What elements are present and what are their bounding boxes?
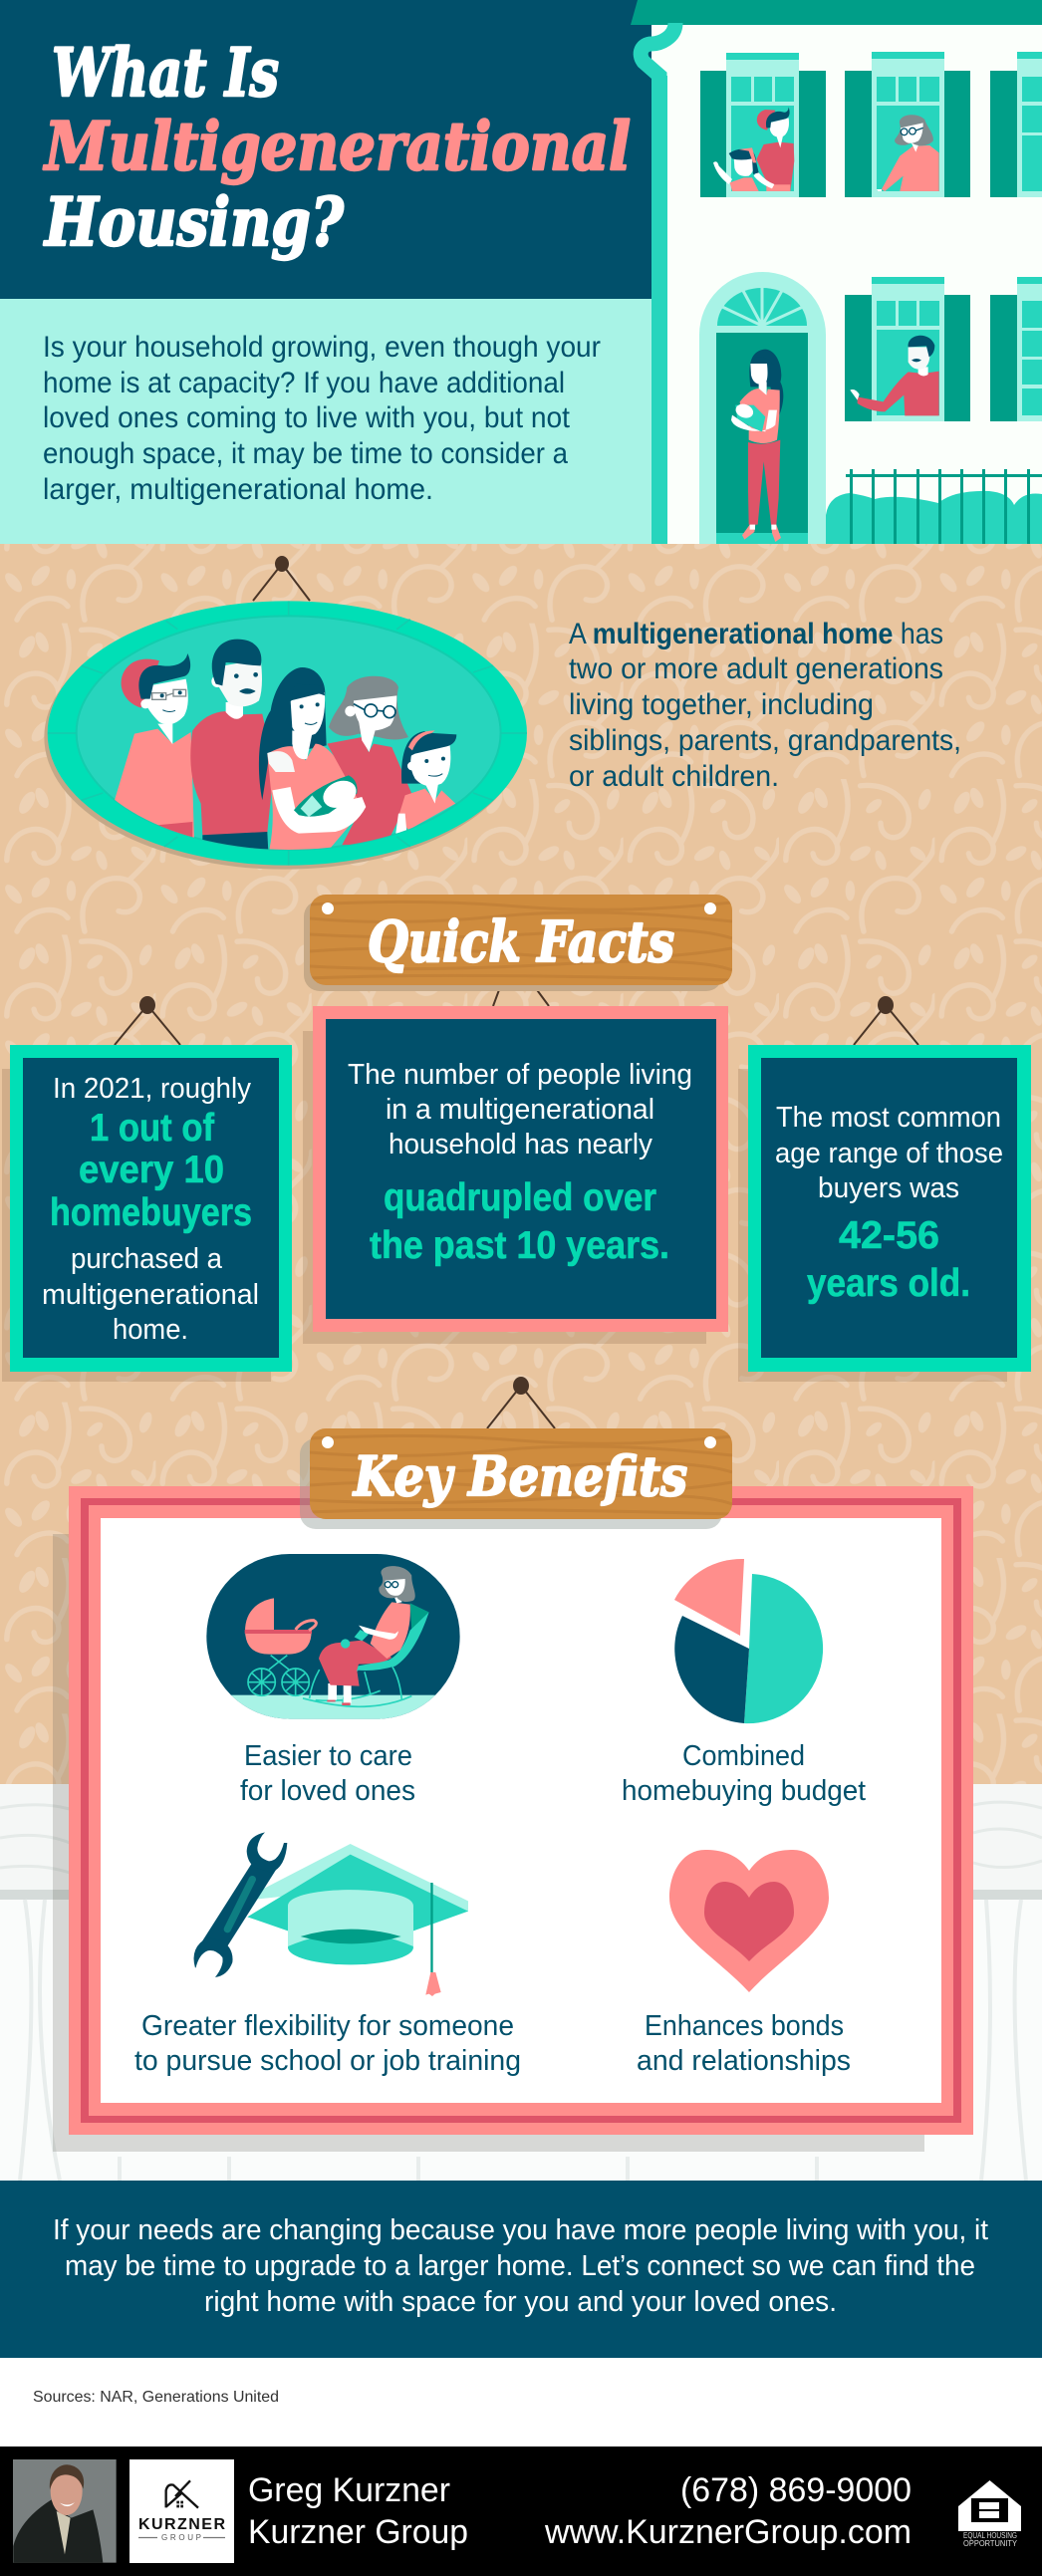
- definition text: [569, 618, 961, 793]
- person: father: [190, 640, 274, 852]
- panel: intro: [0, 299, 651, 544]
- grandmother: [319, 1566, 415, 1705]
- panel: title background: [0, 0, 651, 299]
- agent name: Kurzner Group: [248, 2513, 468, 2551]
- icon: heart: [669, 1850, 829, 1992]
- card text: [42, 1073, 259, 1346]
- card text: multigenerational: [42, 1279, 259, 1311]
- card text: household has nearly: [389, 1129, 652, 1160]
- window: upper middle: [845, 52, 970, 197]
- closing text: right home with space for you and your loved ones.: [204, 2286, 837, 2318]
- intro text: Is your household growing, even though your: [43, 331, 601, 364]
- icon: grandmother with stroller: [206, 1554, 460, 1721]
- window: lower middle: [845, 277, 970, 421]
- benefit labels: [134, 1740, 866, 2077]
- heading: Quick Facts: [368, 909, 674, 975]
- wooden sign: Quick Facts: [304, 895, 732, 991]
- card text: years old.: [807, 1262, 970, 1305]
- figure in upper middle window: [877, 115, 939, 191]
- panel: key benefits frame: [53, 1486, 973, 2152]
- card text: homebuyers: [50, 1191, 252, 1234]
- company logo: [130, 2459, 234, 2563]
- intro text: home is at capacity? If you have additional: [43, 367, 565, 399]
- card text: quadrupled over: [384, 1176, 656, 1219]
- person: grandmother: [327, 676, 411, 845]
- contact details: [544, 2471, 912, 2551]
- title: Multigenerational: [43, 108, 631, 185]
- card text: purchased a: [71, 1243, 223, 1275]
- window: upper left: [700, 53, 826, 197]
- hanging wire: oval: [253, 556, 310, 601]
- panel: call to action: [0, 2181, 1042, 2358]
- card text: 1 out of: [90, 1107, 215, 1150]
- wooden sign: Key Benefits: [300, 1428, 732, 1529]
- card text: [348, 1059, 692, 1267]
- figure: mother and baby in doorway: [731, 350, 783, 542]
- contact details: (678) 869-9000: [680, 2471, 912, 2509]
- company logo: KURZNER: [138, 2516, 225, 2533]
- card: age range: [738, 996, 1031, 1382]
- heading: Key Benefits: [352, 1444, 687, 1508]
- bushes: [826, 491, 1042, 544]
- person: young man: [115, 653, 194, 840]
- background: patterned wall: [0, 544, 1042, 1784]
- hanging wires: center card: [493, 968, 549, 1006]
- fence: [846, 469, 1042, 544]
- title: What Is: [52, 34, 279, 112]
- intro text: [43, 331, 601, 506]
- person: baby in arms: [272, 775, 366, 834]
- panel: footer: [0, 2447, 1042, 2576]
- contact details: www.KurznerGroup.com: [544, 2513, 912, 2551]
- icon: pie chart: [674, 1559, 823, 1723]
- definition text: two or more adult generations: [569, 652, 943, 685]
- closing text: If your needs are changing because you have more people living with you, it: [53, 2214, 988, 2246]
- card text: The number of people living: [348, 1059, 692, 1091]
- icon: equal housing opportunity: EQUAL HOUSING: [963, 2531, 1017, 2540]
- benefit labels: to pursue school or job training: [134, 2045, 521, 2077]
- figure in lower middle window: [850, 336, 939, 415]
- door with arch: [699, 272, 826, 544]
- agent photo: [13, 2459, 117, 2563]
- person: mother: [259, 667, 366, 852]
- definition text: siblings, parents, grandparents,: [569, 724, 961, 757]
- benefit labels: homebuying budget: [622, 1775, 866, 1807]
- illustration: house facade: [631, 0, 1042, 544]
- agent name: Greg Kurzner: [248, 2471, 450, 2509]
- title: Housing?: [43, 183, 345, 261]
- definition text: or adult children.: [569, 760, 779, 793]
- icon: equal housing opportunity: OPPORTUNITY: [963, 2539, 1018, 2548]
- benefit labels: Enhances bonds: [645, 2010, 844, 2042]
- intro text: enough space, it may be time to consider a: [43, 437, 568, 470]
- family portrait in oval frame: [44, 601, 527, 870]
- closing text: may be time to upgrade to a larger home. Let’s connect so we can find the: [65, 2250, 975, 2282]
- benefit labels: Greater flexibility for someone: [141, 2010, 514, 2042]
- card text: buyers was: [818, 1172, 959, 1204]
- benefit labels: Easier to care: [244, 1740, 412, 1772]
- window: lower right: [990, 277, 1042, 421]
- card text: home.: [113, 1314, 188, 1346]
- card text: the past 10 years.: [370, 1224, 669, 1267]
- card text: age range of those: [775, 1138, 1003, 1169]
- benefit labels: Combined: [682, 1740, 805, 1772]
- rocking chair: [303, 1603, 429, 1706]
- definition text: A multigenerational home has: [569, 618, 943, 650]
- intro text: larger, multigenerational home.: [43, 473, 433, 506]
- icon: wrench and graduation cap: [194, 1832, 468, 1996]
- card text: [775, 1102, 1003, 1305]
- benefit labels: for loved ones: [240, 1775, 415, 1807]
- intro text: loved ones coming to live with you, but not: [43, 401, 571, 434]
- card: 1 out of 10: [2, 996, 292, 1382]
- title: [43, 34, 631, 261]
- card text: 42-56: [839, 1214, 939, 1257]
- window: upper right: [990, 52, 1042, 197]
- sources: Sources: NAR, Generations United: [33, 2389, 279, 2406]
- card text: every 10: [79, 1149, 224, 1191]
- benefit labels: and relationships: [637, 2045, 851, 2077]
- company logo: GROUP: [161, 2533, 201, 2542]
- figures in upper left window: [713, 107, 794, 191]
- background: white wood floor: [0, 1784, 1042, 2181]
- person: young girl: [395, 730, 456, 834]
- agent name: [248, 2471, 468, 2551]
- stroller: [245, 1598, 316, 1695]
- closing text: [53, 2214, 988, 2318]
- card: quadrupled: [303, 1006, 728, 1344]
- downspout: [641, 23, 675, 90]
- icon: equal housing opportunity: [958, 2480, 1021, 2548]
- card text: in a multigenerational: [386, 1094, 654, 1126]
- hanging wire: key benefits: [487, 1377, 555, 1428]
- roof: [631, 0, 1042, 25]
- card text: In 2021, roughly: [53, 1073, 251, 1105]
- definition text: living together, including: [569, 688, 874, 721]
- card text: The most common: [776, 1102, 1001, 1134]
